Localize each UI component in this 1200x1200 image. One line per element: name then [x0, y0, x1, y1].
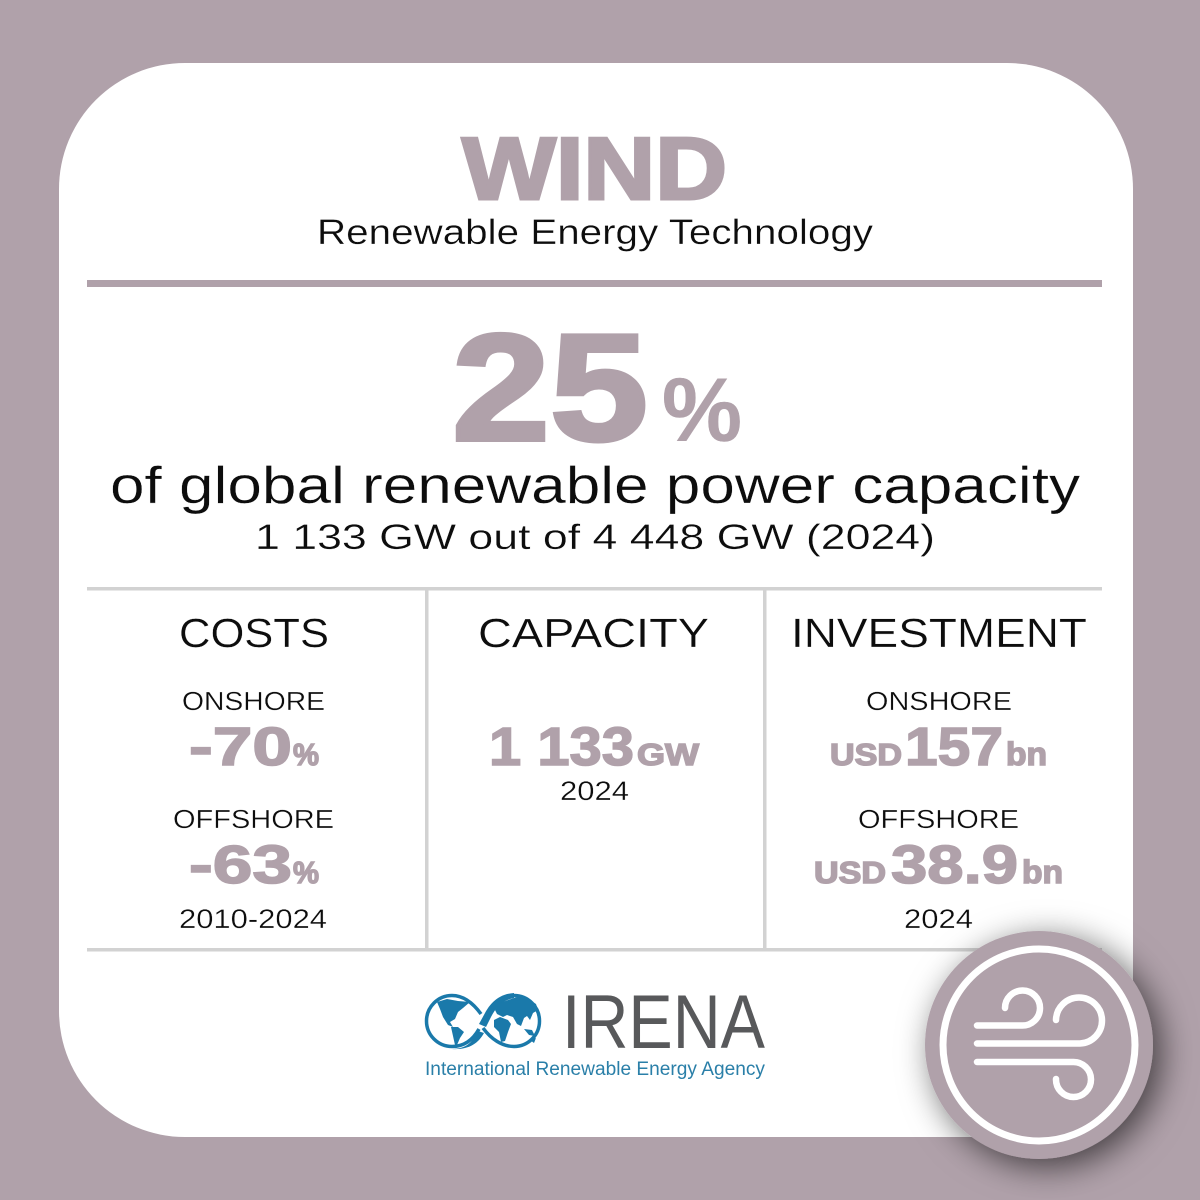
- year: 2024: [560, 776, 629, 806]
- stat: offshore investment: USD: [814, 855, 886, 890]
- headline stat: 25: [452, 303, 648, 473]
- stat: offshore investment: bn: [1022, 854, 1063, 890]
- stat: capacity: [489, 717, 700, 777]
- panel: capacity: [478, 610, 709, 806]
- stat: offshore cost change: -63: [189, 835, 292, 895]
- stat: capacity: GW: [637, 737, 700, 772]
- icon: infinity globe: [426, 993, 540, 1049]
- stat: offshore investment: 38.9: [891, 835, 1018, 895]
- agency name: International Renewable Energy Agency: [425, 1059, 765, 1080]
- subtitle: Renewable Energy Technology: [317, 213, 874, 252]
- stat: onshore cost change: %: [293, 737, 319, 772]
- logo: IRENA: [425, 980, 765, 1080]
- stat: onshore cost change: -70: [189, 717, 292, 777]
- heading: capacity: CAPACITY: [478, 610, 709, 656]
- headline stat: [452, 303, 742, 473]
- panel: costs: [173, 610, 334, 934]
- stat: offshore cost change: %: [293, 855, 319, 890]
- icon: wind badge: [925, 931, 1153, 1159]
- heading: investment: INVESTMENT: [791, 610, 1087, 656]
- stat: offshore investment: [814, 835, 1063, 895]
- stat: capacity: 1 133: [489, 717, 634, 777]
- year: 2024: [904, 904, 973, 934]
- wordmark: IRENA: [562, 980, 765, 1065]
- label: onshore: ONSHORE: [866, 686, 1012, 716]
- stat: onshore cost change: [189, 717, 319, 777]
- stat: offshore cost change: [189, 835, 319, 895]
- label: onshore: ONSHORE: [182, 686, 325, 716]
- headline stat: %: [662, 361, 742, 461]
- stat: onshore investment: [830, 717, 1047, 777]
- stat: onshore investment: 157: [905, 717, 1003, 777]
- label: offshore: OFFSHORE: [173, 804, 334, 834]
- stat: onshore investment: bn: [1006, 736, 1047, 772]
- panel: investment: [791, 610, 1087, 934]
- headline detail: 1 133 GW out of 4 448 GW (2024): [255, 518, 935, 557]
- stat: onshore investment: USD: [830, 737, 902, 772]
- title: WIND: [462, 119, 727, 218]
- period: 2010-2024: [179, 904, 327, 934]
- heading: costs: COSTS: [179, 610, 329, 656]
- headline description: of global renewable power capacity: [110, 457, 1080, 515]
- label: offshore: OFFSHORE: [858, 804, 1019, 834]
